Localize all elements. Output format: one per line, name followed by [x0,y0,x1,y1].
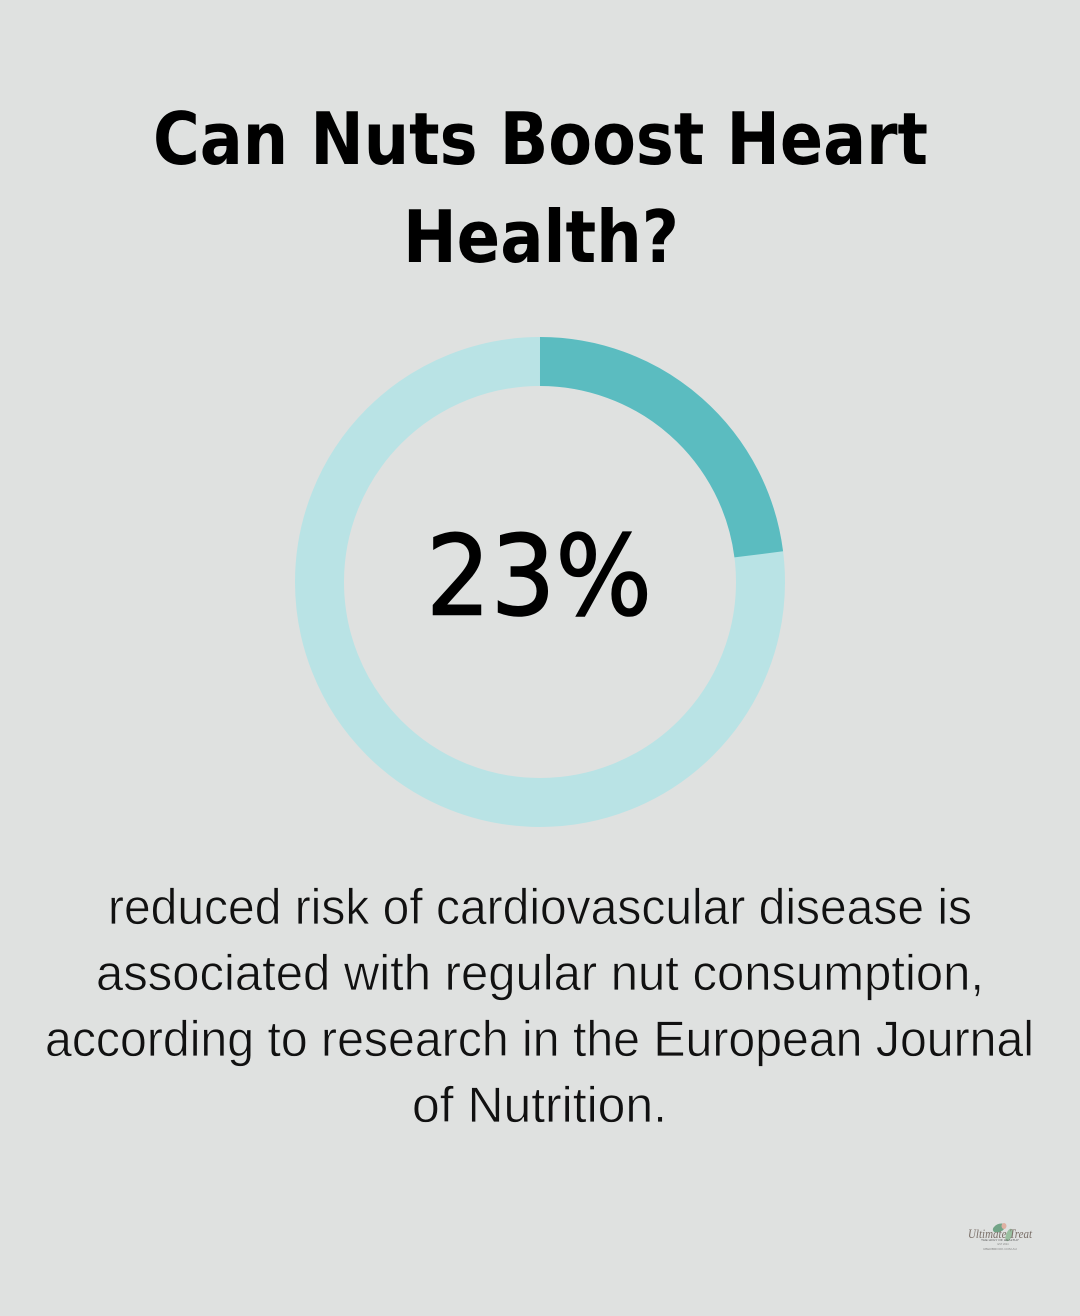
title [153,97,928,279]
donut chart: 23% [320,362,760,802]
title: Can Nuts Boost Heart [153,97,928,181]
description text [45,879,1034,1133]
description text: reduced risk of cardiovascular disease is [108,879,972,935]
description text: of Nutrition. [412,1077,667,1133]
logo tagline: THE HOLY OF HEALTHY [981,1238,1019,1242]
logo leaf icon [991,1222,1014,1242]
logo website: UBERBROOK.COM.AU [983,1247,1017,1251]
title: Health? [403,195,679,279]
description text: according to research in the European Journal [45,1011,1034,1067]
description text: associated with regular nut consumption, [96,945,984,1001]
logo wordmark: Ultimate Treat [968,1226,1032,1241]
logo established: EST 2024 [997,1243,1009,1246]
logo: Ultimate Treat [968,1222,1032,1251]
donut value: 23% [426,512,652,642]
